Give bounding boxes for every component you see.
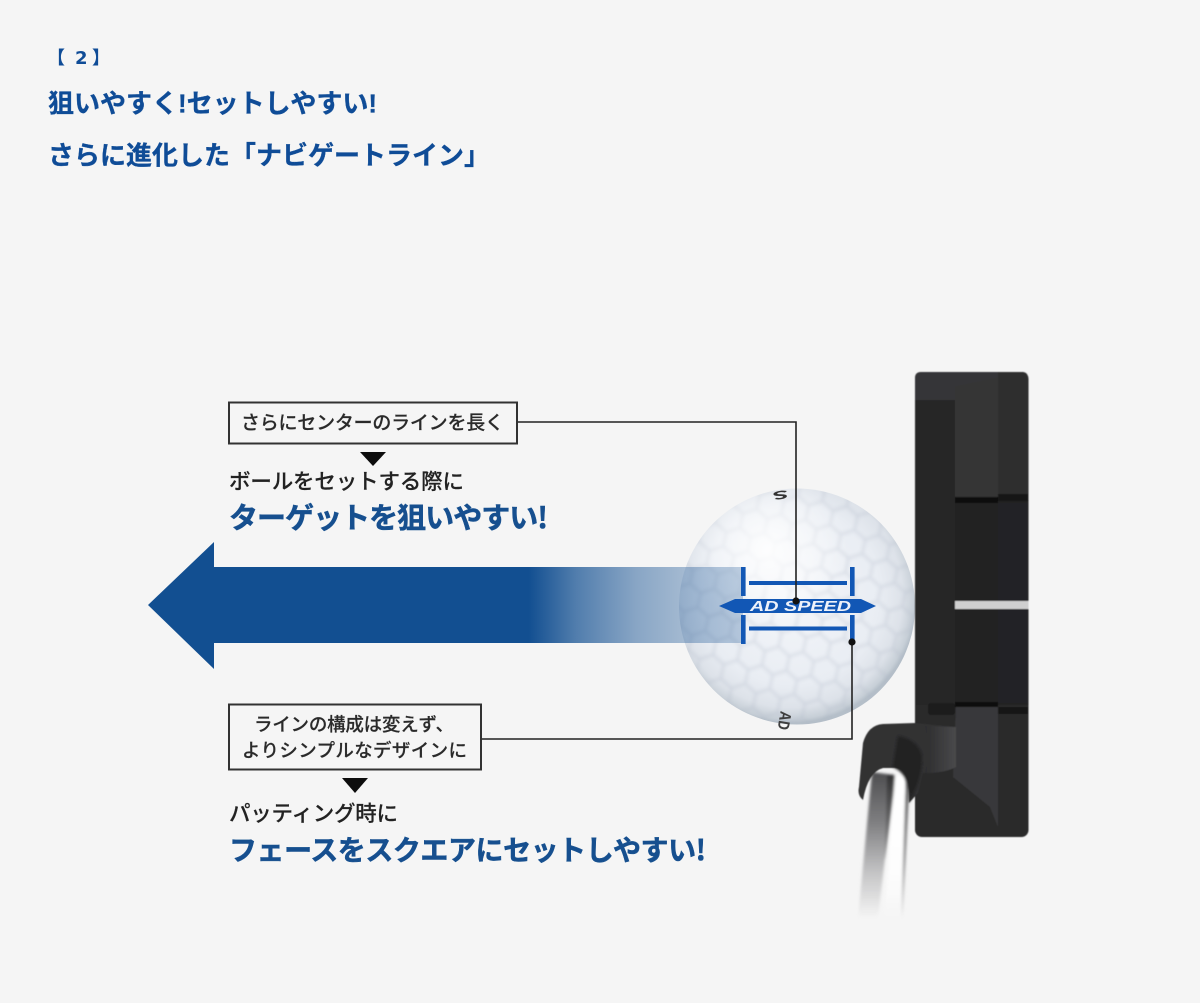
shaft bbox=[858, 772, 909, 918]
emphasis text top: ターゲットを狙いやすい! bbox=[229, 495, 548, 537]
infographic bbox=[48, 48, 1030, 910]
triangle pointer bottom bbox=[342, 778, 368, 793]
neck highlight bbox=[925, 726, 956, 773]
callout box text bottom line 2: よりシンプルなデザインに bbox=[242, 737, 467, 763]
callout: top bbox=[229, 402, 548, 537]
icon: golf ball bbox=[679, 488, 915, 730]
hosel shadow bbox=[893, 736, 922, 803]
right upper bar bbox=[850, 567, 855, 596]
sub text bottom: パッティング時に bbox=[229, 797, 398, 828]
ball logo bottom: AD bbox=[772, 709, 797, 732]
callout: bottom bbox=[229, 704, 706, 869]
emphasis text bottom: フェースをスクエアにセットしやすい! bbox=[229, 829, 706, 869]
recess shadows bbox=[955, 497, 998, 503]
left strip bbox=[916, 400, 955, 705]
left upper bar bbox=[741, 567, 746, 596]
section number: 2 bbox=[75, 48, 88, 69]
callout box bottom bbox=[229, 704, 481, 770]
centre banner bbox=[719, 599, 876, 613]
callout box text bottom line 1: ラインの構成は変えず、 bbox=[254, 711, 454, 737]
icon: putter bbox=[858, 372, 1028, 918]
leader line top bbox=[517, 422, 800, 605]
left lower bar bbox=[741, 615, 746, 644]
lower left notch bbox=[928, 703, 955, 715]
section number: 】 bbox=[92, 48, 110, 68]
centre recess bbox=[955, 500, 1028, 705]
hosel neck bbox=[858, 723, 956, 803]
section number: 【 bbox=[47, 48, 65, 68]
arrow bbox=[148, 542, 743, 669]
lower centre line bbox=[749, 626, 847, 630]
putter head body bbox=[915, 372, 1028, 837]
upper right panel bbox=[998, 372, 1028, 495]
upper mid panel bbox=[955, 378, 998, 500]
heading block bbox=[47, 48, 490, 170]
sub text top: ボールをセットする際に bbox=[229, 465, 464, 496]
ball logo top: S bbox=[772, 487, 790, 505]
right lower bar bbox=[850, 615, 855, 644]
upper centre line bbox=[749, 581, 847, 585]
top facet bbox=[915, 372, 998, 400]
heading line 1: 狙いやすく!セットしやすい! bbox=[48, 88, 377, 118]
lower mid facet bbox=[953, 707, 998, 827]
navigate line marks bbox=[719, 567, 876, 644]
callout box text top: さらにセンターのラインを長く bbox=[241, 408, 504, 435]
leader line bottom bbox=[481, 638, 856, 739]
triangle pointer top bbox=[360, 452, 386, 466]
banner text: AD SPEED bbox=[749, 599, 852, 615]
callout box top bbox=[229, 402, 517, 444]
heading line 2: さらに進化した「ナビゲートライン」 bbox=[48, 140, 490, 170]
white centre line on head bbox=[955, 601, 1028, 609]
